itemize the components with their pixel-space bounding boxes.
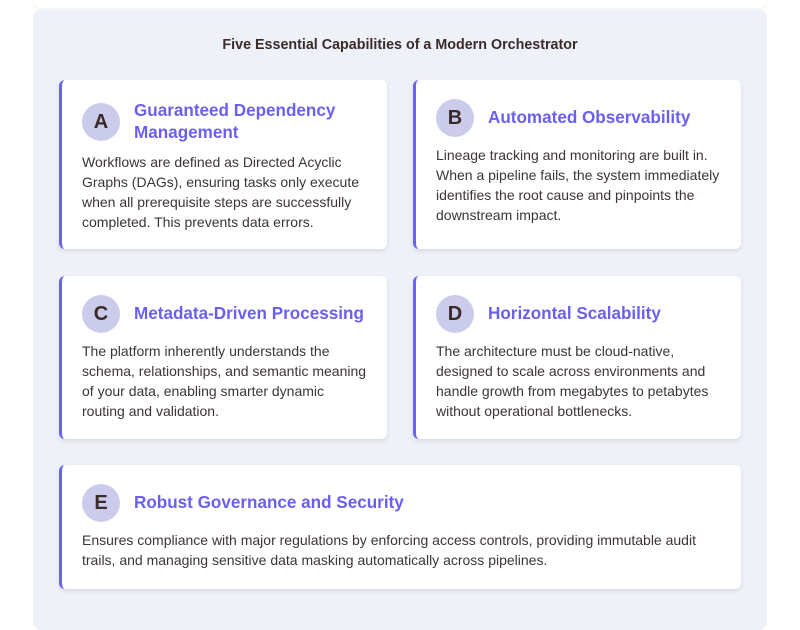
icon A	[82, 103, 120, 141]
title: Five Essential Capabilities of a Modern Orchestrator	[222, 37, 578, 53]
card B	[413, 80, 741, 249]
card D	[413, 276, 741, 439]
icon B	[436, 99, 474, 137]
card A	[59, 80, 387, 249]
body D: without operational bottlenecks.	[436, 403, 632, 419]
card C	[59, 276, 387, 439]
heading A	[134, 101, 336, 142]
body A: Graphs (DAGs), ensuring tasks only execute	[82, 174, 359, 190]
body B: Lineage tracking and monitoring are built in.	[436, 147, 708, 163]
heading C: Metadata-Driven Processing	[134, 304, 364, 323]
body B: identifies the root cause and pinpoints the	[436, 187, 694, 203]
body A	[82, 154, 359, 230]
body B	[436, 147, 720, 223]
icon B: B	[448, 107, 462, 129]
icon C	[82, 295, 120, 333]
body E: Ensures compliance with major regulations by enforcing access controls, providing immutable audit	[82, 532, 696, 548]
body E	[82, 532, 696, 568]
icon A: A	[94, 111, 108, 133]
heading B: Automated Observability	[488, 108, 690, 127]
body D: handle growth from megabytes to petabytes	[436, 383, 708, 399]
heading D: Horizontal Scalability	[488, 304, 661, 323]
body D	[436, 343, 708, 419]
icon D	[436, 295, 474, 333]
body A: when all prerequisite steps are successfully	[82, 194, 351, 210]
body A: completed. This prevents data errors.	[82, 214, 314, 230]
card E	[59, 465, 741, 589]
body C: The platform inherently understands the	[82, 343, 329, 359]
icon E	[82, 484, 120, 522]
icon C: C	[94, 303, 108, 325]
body D: designed to scale across environments and	[436, 363, 705, 379]
icon D: D	[448, 303, 462, 325]
body B: downstream impact.	[436, 207, 561, 223]
body D: The architecture must be cloud-native,	[436, 343, 674, 359]
heading A: Guaranteed Dependency	[134, 101, 335, 120]
body A: Workflows are defined as Directed Acyclic	[82, 154, 342, 170]
body C: schema, relationships, and semantic meaning	[82, 363, 366, 379]
body C: routing and validation.	[82, 403, 219, 419]
body B: When a pipeline fails, the system immediately	[436, 167, 719, 183]
heading A: Management	[134, 123, 238, 142]
icon E: E	[94, 492, 108, 514]
body C: of your data, enabling smarter dynamic	[82, 383, 324, 399]
body E: trails, and managing sensitive data masking automatically across pipelines.	[82, 552, 547, 568]
heading E: Robust Governance and Security	[134, 493, 404, 512]
body C	[82, 343, 366, 419]
